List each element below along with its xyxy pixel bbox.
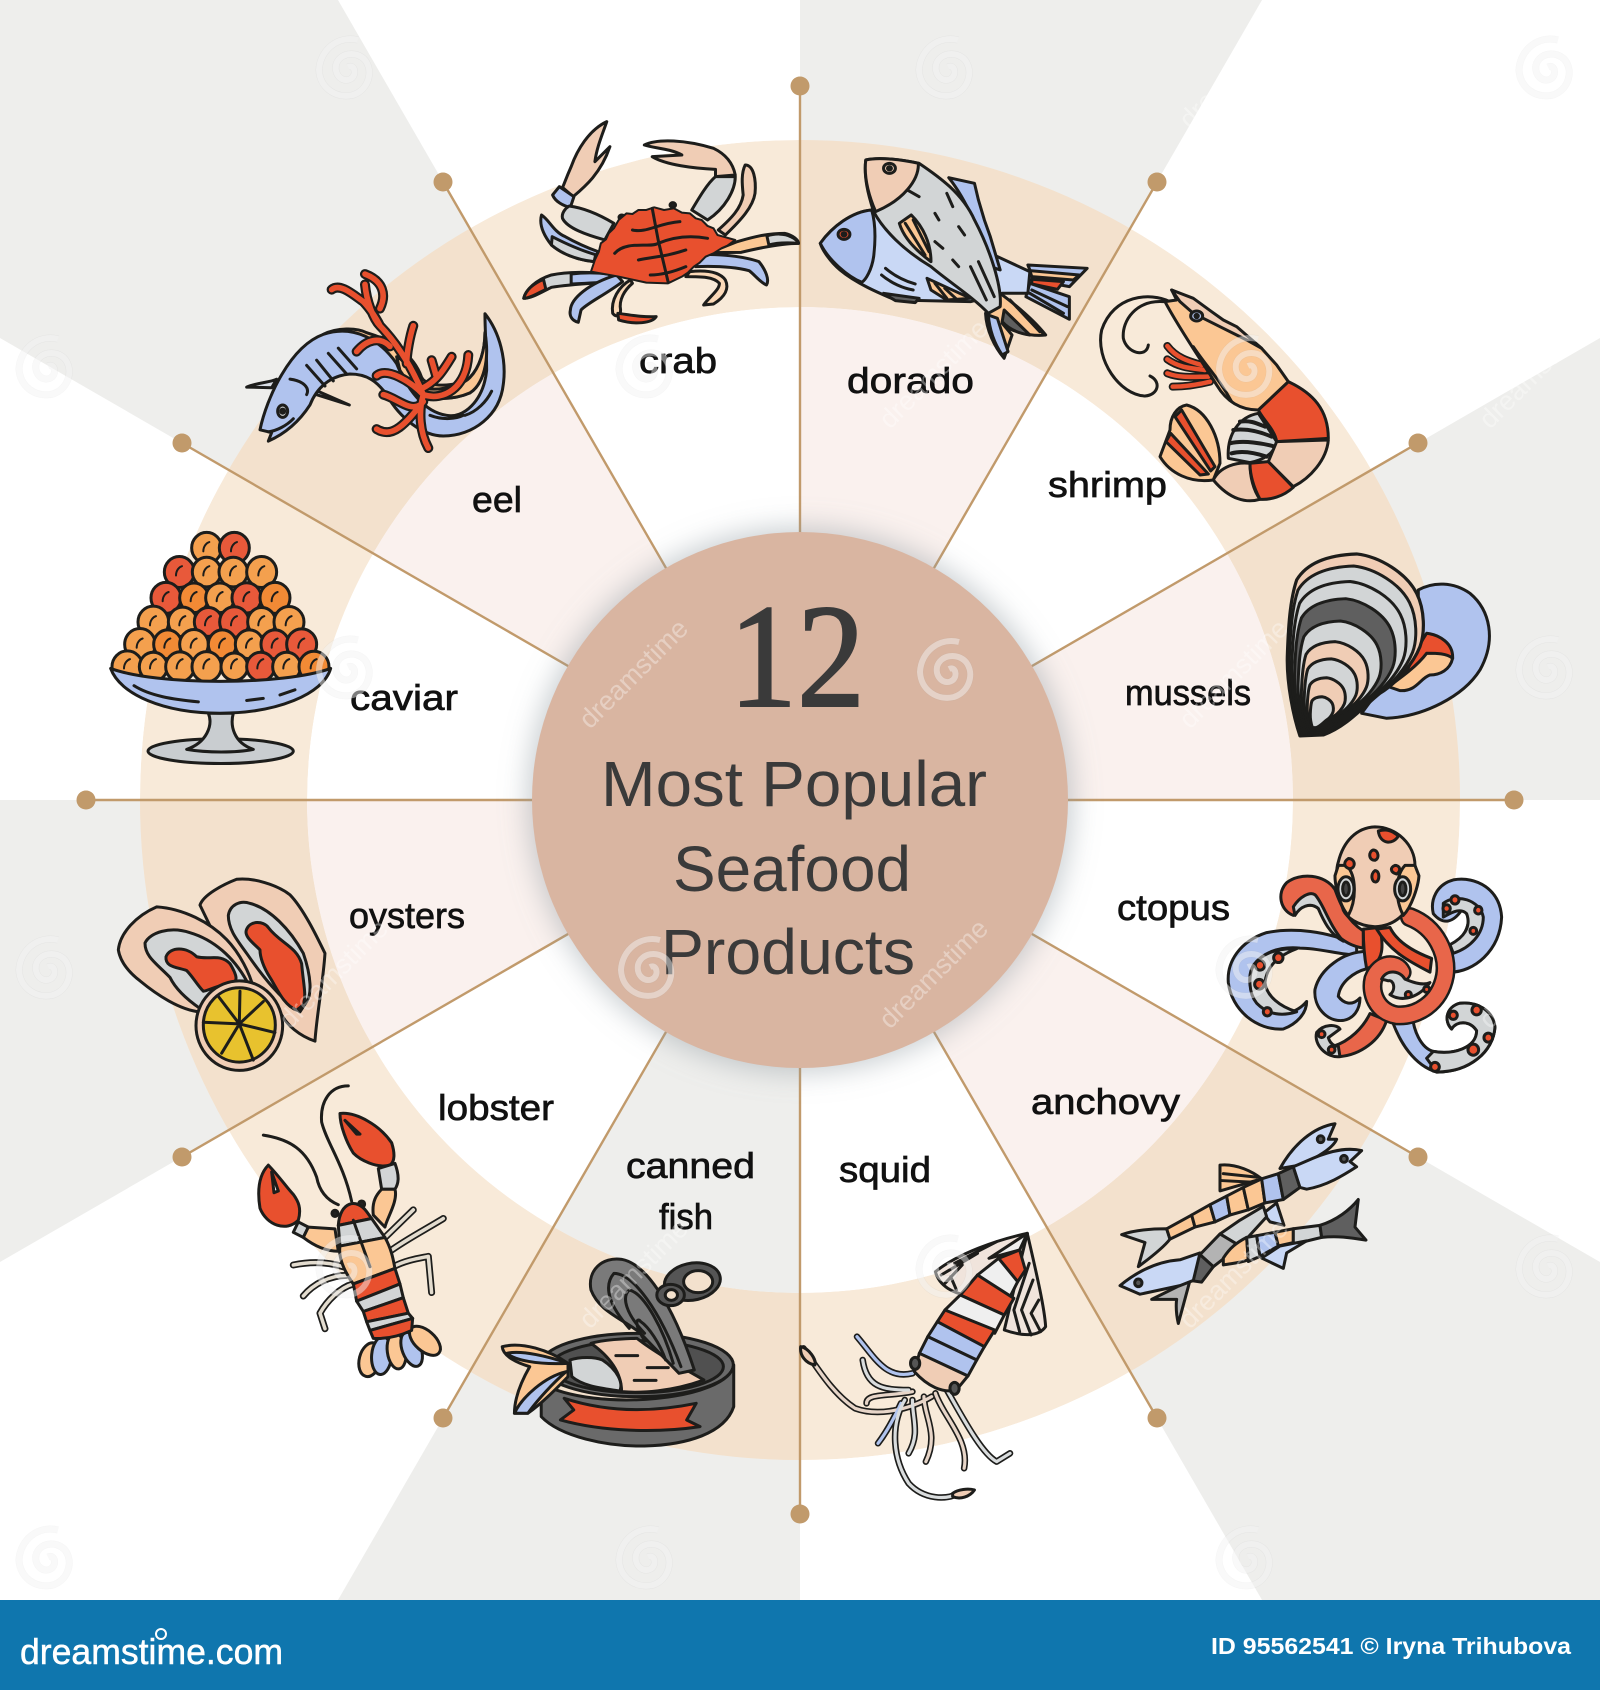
label: anchovy: anchovy bbox=[1031, 1081, 1180, 1122]
label: eel: eel bbox=[472, 479, 522, 520]
center circle with title: Products bbox=[661, 916, 915, 988]
icon: anchovies bbox=[1120, 1124, 1366, 1323]
watermark: spirals and dreamstime text: dreamstime bbox=[1473, 313, 1594, 434]
label: shrimp: shrimp bbox=[1048, 464, 1167, 505]
footer bar: dreamstime.com bbox=[20, 1631, 283, 1672]
spokes with end dots bbox=[76, 76, 1524, 1524]
label: squid: squid bbox=[839, 1149, 931, 1190]
watermark: spirals and dreamstime text: dreamstime bbox=[873, 313, 994, 434]
label: canned fish: fish bbox=[659, 1196, 713, 1237]
center circle with title bbox=[528, 528, 1072, 1072]
icon: dorado fish bbox=[820, 159, 1087, 358]
watermark: spirals and dreamstime text: dreamstime bbox=[273, 913, 394, 1034]
icon: mussels bbox=[1287, 554, 1489, 736]
footer bar bbox=[0, 1600, 1600, 1690]
watermark: spirals and dreamstime text: dreamstime bbox=[573, 613, 694, 734]
label: oysters: oysters bbox=[349, 895, 465, 936]
outer beige ring with two-tone sectors bbox=[140, 140, 1460, 1460]
icon: oysters with lemon bbox=[118, 879, 325, 1070]
center circle with title: 12 bbox=[729, 575, 865, 739]
watermark: spirals and dreamstime text: dreamstime bbox=[1473, 913, 1594, 1034]
watermark: spirals and dreamstime text: dreamstime bbox=[1173, 13, 1294, 134]
center circle with title: Seafood bbox=[673, 833, 911, 905]
watermark: spirals and dreamstime text: dreamstime bbox=[1173, 613, 1294, 734]
watermark: spirals and dreamstime text: dreamstime bbox=[573, 13, 694, 134]
icon: crab bbox=[524, 122, 799, 323]
icon: squid bbox=[801, 1233, 1046, 1498]
label: dorado: dorado bbox=[847, 360, 974, 401]
watermark: spirals and dreamstime text: dreamstime bbox=[573, 1213, 694, 1334]
label: crab: crab bbox=[639, 340, 717, 381]
label: mussels: mussels bbox=[1125, 672, 1251, 713]
footer bar: ID 95562541 © Iryna Trihubova bbox=[1211, 1633, 1571, 1659]
label: caviar: caviar bbox=[350, 677, 458, 718]
label: canned fish: canned bbox=[626, 1145, 755, 1186]
icon: shrimp bbox=[1101, 290, 1328, 501]
icon: octopus bbox=[1228, 827, 1502, 1072]
icon: eel with coral bbox=[247, 274, 504, 448]
inner disc with pink and white sectors bbox=[307, 307, 1293, 1293]
watermark: spirals and dreamstime text: dreamstime bbox=[873, 913, 994, 1034]
icon: canned fish bbox=[502, 1258, 734, 1446]
label: canned fish bbox=[626, 1145, 755, 1237]
center circle with title: Most Popular bbox=[601, 748, 987, 820]
icon: caviar bowl bbox=[111, 532, 331, 764]
label: octopus: ctopus bbox=[1117, 887, 1230, 928]
watermark: spirals and dreamstime text: dreamstime bbox=[1173, 1213, 1294, 1334]
icon: lobster bbox=[259, 1086, 445, 1379]
label: lobster: lobster bbox=[438, 1087, 554, 1128]
